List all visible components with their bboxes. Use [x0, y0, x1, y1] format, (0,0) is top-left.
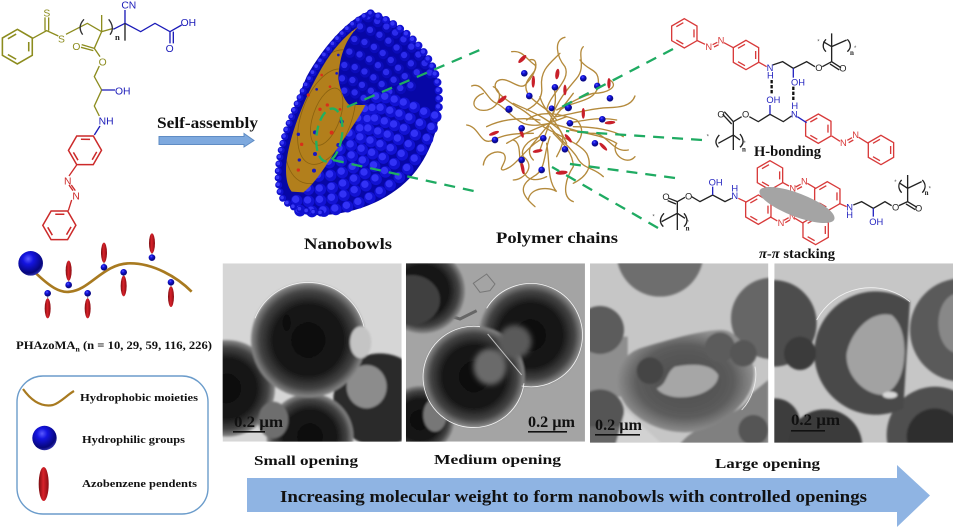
upper chain	[672, 19, 767, 70]
H-bonding structure	[672, 19, 894, 165]
H-bonding structure: *	[817, 39, 820, 45]
H-bonding structure: N	[767, 63, 773, 73]
right chain: *	[894, 180, 897, 186]
olive backbone and benzene: O	[99, 57, 107, 68]
lower chain	[806, 114, 894, 165]
right chain	[853, 175, 932, 213]
polymer chains cluster	[467, 37, 635, 207]
azobenzene rings: N	[801, 177, 808, 187]
blue end group: O	[166, 44, 174, 55]
H-bonding structure: *	[707, 134, 710, 140]
pi-pi stacking structure: N	[846, 202, 853, 212]
blue hydrophilic spheres	[492, 70, 613, 173]
H-bonding structure: H	[791, 101, 798, 111]
scale bar: panel 3: 0.2 µm	[595, 417, 643, 434]
pi-pi stacking structure: H	[846, 210, 853, 220]
pi-pi stacking structure: H	[731, 184, 738, 194]
right chain: *	[929, 187, 932, 193]
embedded red and blue dots	[297, 74, 341, 172]
label: pi-pi stacking: π-π stacking	[759, 247, 835, 262]
blue end group: NH	[99, 116, 114, 127]
small spheres	[44, 254, 174, 297]
left chain	[652, 192, 732, 233]
text: hydrophobic moieties: Hydrophobic moieties	[80, 393, 198, 404]
green dashed zoom lines	[333, 49, 702, 228]
label: PHAzoMAn series: n	[76, 346, 80, 354]
pi-pi stacking structure	[652, 161, 932, 245]
left chain: n	[686, 225, 690, 233]
H-bonding structure: O	[742, 110, 749, 120]
H-bonding structure: OH	[766, 95, 780, 105]
olive backbone and benzene: S	[43, 9, 50, 20]
right chain: n	[925, 189, 929, 197]
arrow caption: Increasing molecular weight to form nanobowls with controlled openings	[280, 487, 867, 506]
olive backbone and benzene	[2, 9, 113, 116]
H-bonding structure: n	[850, 49, 854, 57]
backbone	[36, 263, 192, 292]
H-bonding structure: O	[717, 110, 725, 120]
red azobenzene pendents	[488, 54, 615, 175]
TEM image: large opening, panel 4	[774, 264, 953, 443]
right chain: O	[915, 203, 922, 213]
scale bar: panel 1: 0.2 µm	[234, 414, 284, 431]
scale bar: panel 4: 0.2 µm	[791, 412, 841, 429]
pi-pi stacking structure: N	[731, 191, 738, 201]
black dashed hydrogen bonds	[772, 80, 793, 102]
label: Small opening: Small opening	[254, 454, 358, 469]
lower chain: N	[840, 138, 847, 148]
text: azobenzene pendents: Azobenzene pendents	[82, 479, 197, 490]
grey stacking ellipse	[755, 180, 838, 230]
left chain: O	[685, 192, 692, 202]
orange cut face	[286, 27, 365, 192]
H-bonding structure: *	[743, 141, 746, 147]
right chain: O	[892, 203, 899, 213]
blue end group: CN	[121, 1, 136, 12]
blue end group: OH	[115, 87, 130, 98]
icon: hydrophilic sphere	[32, 426, 57, 450]
H-bonding structure: O	[839, 64, 847, 74]
text: hydrophilic groups: Hydrophilic groups	[82, 435, 185, 446]
lower chain: N	[852, 130, 859, 140]
chemical structure: PHAzoMA monomer	[2, 1, 196, 247]
azobenzene rings: N	[778, 218, 784, 228]
H-bonding structure: *	[854, 46, 857, 52]
olive backbone and benzene: O	[72, 42, 80, 53]
blue end group	[94, 1, 196, 135]
olive backbone and benzene: S	[58, 34, 65, 45]
H-bonding structure: H	[767, 70, 774, 80]
H-bonding structure: OH	[791, 78, 805, 88]
icon: azobenzene pendent	[39, 467, 49, 501]
polymer cartoon	[18, 233, 192, 318]
chemical structure: PHAzoMA monomer: n	[115, 32, 120, 42]
polymer brackets and n	[80, 19, 112, 35]
H-bonding structure: n	[742, 146, 746, 154]
legend panel	[17, 376, 208, 514]
pendents	[45, 233, 174, 318]
pi-pi stacking structure: OH	[869, 217, 883, 227]
label: PHAzoMAn series: PHAzoMA	[16, 340, 70, 352]
left rim beads	[277, 13, 371, 213]
brown chains	[467, 37, 635, 207]
label: Polymer chains: Polymer chains	[496, 230, 618, 247]
linkers	[48, 250, 171, 298]
upper chain: N	[705, 42, 712, 52]
icon: hydrophobic curve	[23, 389, 74, 405]
arrow: self-assembly	[159, 134, 254, 147]
pi-pi stacking structure: OH	[709, 178, 723, 188]
label: Nanobowls: Nanobowls	[304, 236, 392, 253]
blue end group: OH	[181, 18, 196, 29]
exterior sphere rows	[296, 92, 437, 212]
label: Self-assembly: Self-assembly	[157, 115, 258, 132]
green dashed zoom circle	[313, 107, 346, 163]
label: Medium opening: Medium opening	[434, 453, 561, 468]
red azobenzene: N	[72, 191, 80, 202]
head sphere	[18, 251, 43, 276]
red azobenzene	[39, 129, 106, 247]
label: Large opening: Large opening	[715, 457, 820, 472]
right rim beads	[370, 13, 439, 110]
H-bonding structure: N	[791, 109, 798, 119]
TEM image: large opening, panel 3	[590, 263, 768, 443]
left chain: *	[687, 220, 690, 226]
TEM image: small opening	[222, 264, 402, 442]
blue sphere shell	[277, 11, 440, 215]
label: PHAzoMAn series: (n = 10, 29, 59, 116, 226)	[80, 340, 212, 352]
interior sphere rows	[342, 16, 432, 102]
upper chain: N	[718, 35, 724, 45]
TEM image: medium opening	[406, 263, 585, 442]
orange texture	[286, 30, 356, 184]
legend box	[17, 376, 208, 514]
red azobenzene: N	[64, 177, 71, 188]
left chain: *	[652, 214, 655, 220]
left chain: O	[662, 192, 670, 202]
azobenzene rings: N	[789, 183, 796, 193]
scale bar: panel 2: 0.2 µm	[528, 414, 576, 431]
nanobowl illustration	[252, 11, 440, 217]
azobenzene rings	[738, 161, 847, 245]
H-bonding structure: O	[815, 63, 823, 73]
label: H-bonding: H-bonding	[754, 144, 822, 160]
azobenzene rings: N	[789, 211, 796, 221]
arrow: increasing molecular weight	[247, 465, 930, 527]
